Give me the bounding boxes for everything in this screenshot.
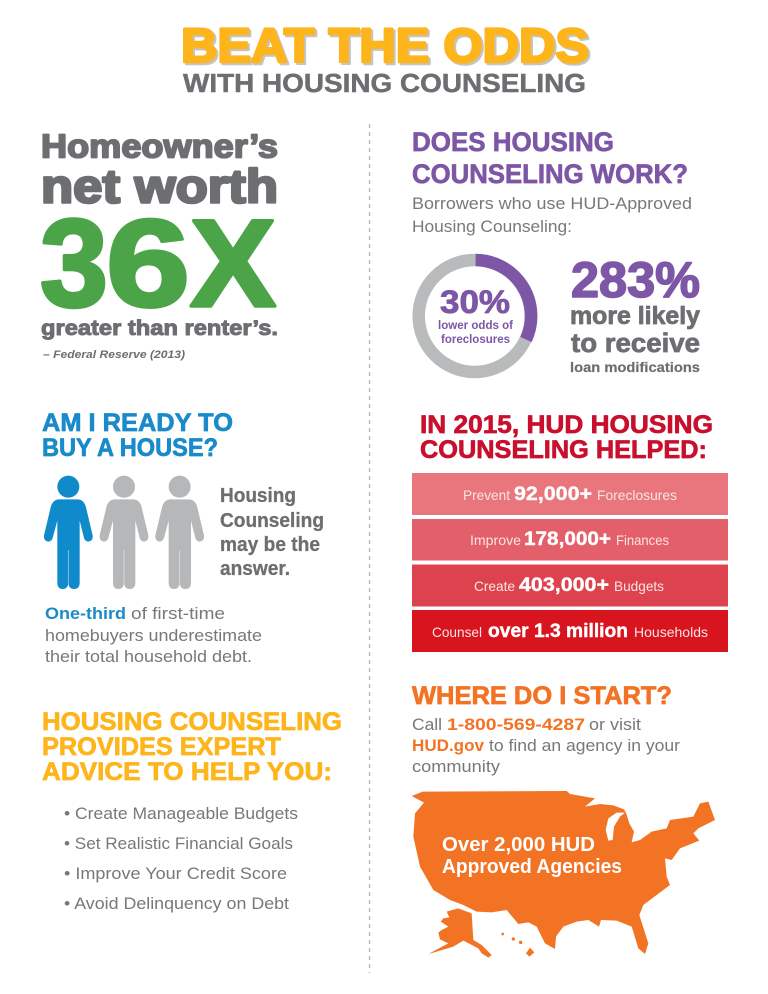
map: United States (412, 791, 715, 958)
panel: does housing counseling work (412, 127, 700, 375)
bar: households: Counsel (432, 624, 482, 640)
panel: in 2015 HUD counseling helped (412, 411, 728, 652)
heading: AM I READY TO (42, 409, 233, 437)
list: advice: • Improve Your Credit Score (64, 864, 287, 883)
text: housing counseling may be the answer: Housing (220, 485, 296, 507)
text: contact details: 1-800-569-4287 (447, 715, 585, 734)
bar: finances: 178,000+ (524, 529, 611, 550)
bar: households: over 1.3 million (488, 621, 628, 642)
title: BEAT THE ODDS (183, 21, 591, 75)
text: contact details: HUD.gov (412, 736, 485, 755)
heading: PROVIDES EXPERT (42, 733, 281, 761)
bar: foreclosures (412, 473, 728, 515)
text: one-third (45, 604, 262, 666)
source: – Federal Reserve (2013) (43, 349, 185, 361)
bar: foreclosures: 92,000+ (514, 484, 592, 505)
heading (420, 411, 713, 464)
text: one-third: homebuyers underestimate (45, 626, 262, 645)
heading: Homeowner's net worth (41, 128, 278, 212)
donut chart: 30%: lower odds of (438, 320, 513, 332)
big number: 36X: 3 (40, 195, 108, 333)
donut chart: 30% (419, 260, 531, 372)
statistic: 283%: 283% (571, 252, 700, 308)
bar: finances: Finances (616, 532, 669, 548)
bar: budgets: 403,000+ (519, 575, 609, 596)
heading: COUNSELING HELPED: (420, 436, 707, 464)
text: housing counseling may be the answer: answer. (220, 558, 290, 580)
panel: am I ready to buy a house (42, 409, 324, 666)
list: advice (64, 804, 298, 913)
panel: net worth statistic (40, 128, 278, 361)
big number: 36X (40, 195, 276, 333)
text: contact details: community (412, 757, 501, 776)
bar: foreclosures: Prevent (463, 487, 510, 503)
text: one-third: One-third (45, 604, 126, 623)
heading: COUNSELING WORK? (412, 159, 688, 189)
title: BEAT THE ODDS (181, 19, 589, 73)
heading: WHERE DO I START? (412, 682, 672, 710)
heading: HOUSING COUNSELING (42, 708, 342, 736)
bar: budgets: Budgets (614, 578, 664, 594)
bar: budgets: Create (474, 578, 515, 594)
donut chart: 30%: foreclosures (441, 334, 510, 346)
heading: ADVICE TO HELP YOU: (42, 758, 332, 786)
list: advice: • Create Manageable Budgets (64, 804, 298, 823)
text: housing counseling may be the answer: Counseling (220, 510, 324, 532)
heading: Homeowner's net worth: Homeowner’s (41, 128, 278, 164)
panel: expert advice (42, 708, 342, 913)
big number: 36X: X (190, 195, 276, 333)
bar: households (412, 610, 728, 652)
bar: budgets (412, 564, 728, 606)
bar: finances: Improve (470, 532, 521, 548)
bar: households: Households (634, 624, 708, 640)
text: contact details: to find an agency in your (489, 736, 680, 755)
map: United States: Over 2,000 HUD (442, 834, 595, 856)
text: contact details (412, 715, 680, 776)
statistic: 283%: loan modifications (570, 359, 700, 375)
list: advice: • Avoid Delinquency on Debt (64, 894, 289, 913)
panel: where do I start (412, 682, 715, 958)
list: advice: • Set Realistic Financial Goals (64, 834, 293, 853)
statistic: 283%: to receive (571, 328, 700, 358)
text: borrowers: Borrowers who use HUD-Approved (412, 194, 692, 213)
big number: 36X: 6 (106, 195, 190, 333)
bar: foreclosures: Foreclosures (597, 487, 677, 503)
heading: IN 2015, HUD HOUSING (420, 411, 713, 439)
title: WITH HOUSING COUNSELING (183, 70, 586, 98)
donut chart: 30%: 30% (440, 284, 510, 320)
heading: Homeowner's net worth: net worth (41, 160, 278, 212)
text: contact details: Call (412, 715, 442, 734)
text: contact details: or visit (589, 715, 641, 734)
title (181, 19, 591, 98)
text: borrowers (412, 194, 692, 236)
text: housing counseling may be the answer (220, 485, 324, 580)
heading: BUY A HOUSE? (42, 434, 218, 462)
bar: finances (412, 519, 728, 560)
heading (42, 708, 342, 786)
text: borrowers: Housing Counseling: (412, 217, 572, 236)
statistic: 283%: more likely (570, 302, 700, 330)
map: United States: Approved Agencies (442, 856, 622, 878)
heading (412, 127, 688, 189)
heading (42, 409, 233, 462)
heading: DOES HOUSING (412, 127, 614, 157)
icon: three people, one highlighted (44, 476, 204, 589)
statistic: 283% (570, 252, 700, 375)
text: one-third: of first-time (131, 604, 225, 623)
text: greater than renter's: greater than renter’s. (41, 316, 278, 340)
text: housing counseling may be the answer: may be the (220, 534, 320, 556)
text: one-third: their total household debt. (45, 647, 252, 666)
